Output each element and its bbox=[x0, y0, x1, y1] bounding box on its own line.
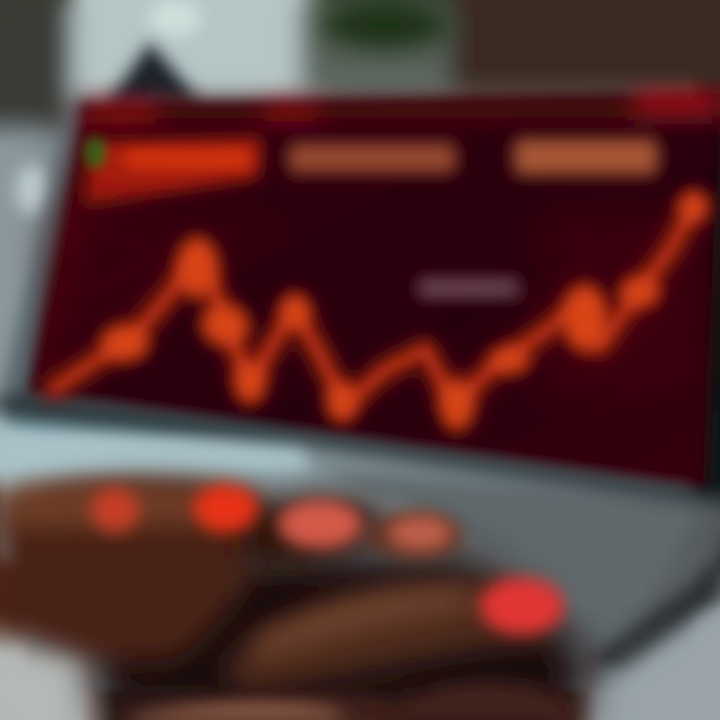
header tab right bbox=[514, 139, 658, 175]
screen panel bbox=[26, 90, 720, 488]
screen label bbox=[418, 278, 520, 298]
finger 1 bbox=[240, 495, 381, 570]
nail 2 bbox=[194, 484, 258, 532]
nail 4 bbox=[388, 516, 452, 550]
header tab center bbox=[288, 143, 456, 173]
laptop lid bezel bbox=[0, 42, 720, 505]
laptop body and keyboard bbox=[0, 405, 720, 720]
line chart bbox=[55, 192, 707, 431]
green status dot bbox=[85, 138, 105, 168]
finger 3 bbox=[225, 580, 554, 690]
nail 5 bbox=[480, 578, 564, 634]
red header block bbox=[84, 138, 262, 205]
nail 3 bbox=[278, 500, 362, 548]
background bbox=[0, 0, 720, 430]
header bar glow bbox=[85, 90, 720, 124]
finger 2 bbox=[367, 510, 463, 560]
hand bbox=[0, 477, 590, 720]
nail 1 bbox=[91, 488, 139, 532]
screen haze bbox=[40, 190, 300, 360]
plant foliage bbox=[320, 0, 450, 50]
palm bbox=[0, 477, 266, 660]
finger 4 bbox=[120, 683, 590, 720]
shadow under hand bbox=[90, 550, 585, 720]
